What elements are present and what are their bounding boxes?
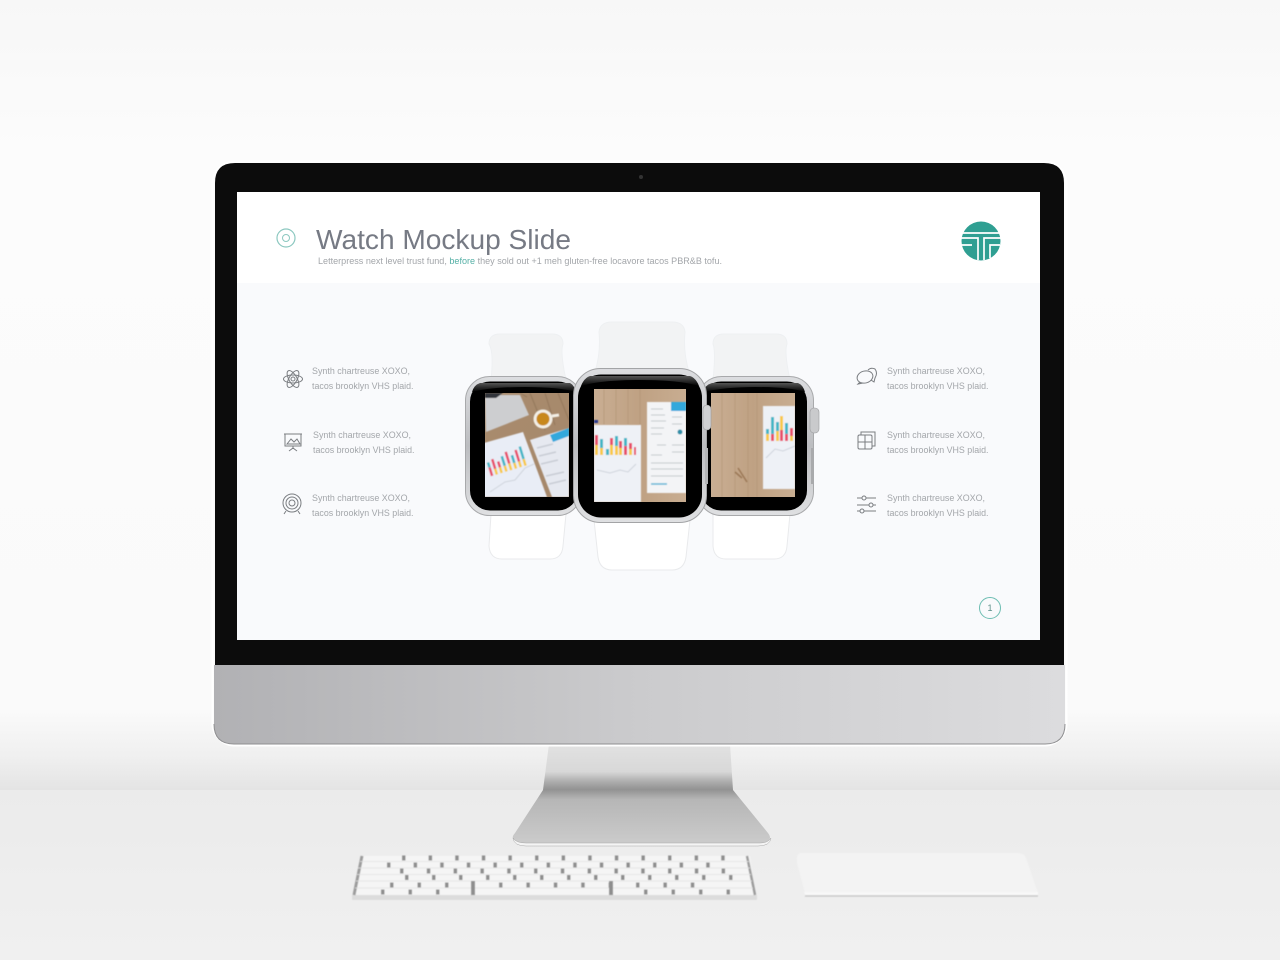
logo [961, 222, 1001, 260]
feature: chat [856, 366, 988, 392]
caption: Synth chartreuse XOXO, [887, 430, 985, 441]
title: Watch Mockup Slide [316, 224, 571, 255]
screen photo: wood and chart paper [722, 393, 795, 497]
watch: center [574, 368, 711, 522]
keyboard [352, 856, 757, 900]
caption [312, 366, 414, 392]
caption: tacos brooklyn VHS plaid. [887, 445, 988, 456]
page number: 1 [987, 603, 993, 613]
caption: tacos brooklyn VHS plaid. [312, 381, 414, 392]
watch: left [466, 376, 582, 516]
caption [312, 493, 414, 519]
right feature list [856, 366, 988, 519]
feature: target [283, 493, 414, 519]
caption [887, 366, 988, 392]
icon: presentation board [284, 434, 302, 451]
band: center [595, 322, 689, 372]
header icon: target ring [277, 229, 295, 247]
feature: presentation [284, 430, 414, 456]
caption: Synth chartreuse XOXO, [887, 493, 985, 504]
caption: tacos brooklyn VHS plaid. [887, 508, 988, 519]
caption: tacos brooklyn VHS plaid. [313, 445, 414, 456]
watch: right [698, 376, 819, 516]
camera [639, 175, 643, 179]
trackpad [797, 853, 1038, 897]
watch bands [489, 322, 790, 570]
caption [887, 493, 988, 519]
feature: sliders [857, 493, 988, 519]
page number [980, 598, 1000, 618]
icon: sliders [857, 496, 876, 513]
key gaps [381, 858, 735, 895]
icon: target [283, 494, 301, 514]
monitor body [212, 162, 1066, 746]
slide screen [237, 192, 1040, 640]
feature: layers [858, 430, 988, 456]
band: right [713, 334, 790, 380]
caption [313, 430, 414, 456]
left feature list [283, 366, 414, 519]
band: left [489, 334, 566, 380]
caption: tacos brooklyn VHS plaid. [312, 508, 414, 519]
icon: chat bubbles [856, 368, 876, 385]
caption: tacos brooklyn VHS plaid. [887, 381, 988, 392]
caption: Synth chartreuse XOXO, [887, 366, 985, 377]
crown [810, 408, 819, 433]
caption [887, 430, 988, 456]
feature: atom [284, 366, 414, 392]
caption: Synth chartreuse XOXO, [312, 493, 410, 504]
caption: Synth chartreuse XOXO, [313, 430, 411, 441]
monitor stand [513, 744, 771, 846]
icon: layered grid [858, 432, 875, 449]
caption: Synth chartreuse XOXO, [312, 366, 410, 377]
subtitle: Letterpress next level trust fund, before they sold out +1 meh gluten-free locavore tacos PBR&B tofu. [318, 256, 722, 266]
icon: atom [284, 369, 302, 389]
center crown [703, 405, 711, 430]
screen photo: wood, chart and report [594, 389, 686, 502]
screen photo: desk with laptop, coffee and charts [484, 393, 569, 497]
